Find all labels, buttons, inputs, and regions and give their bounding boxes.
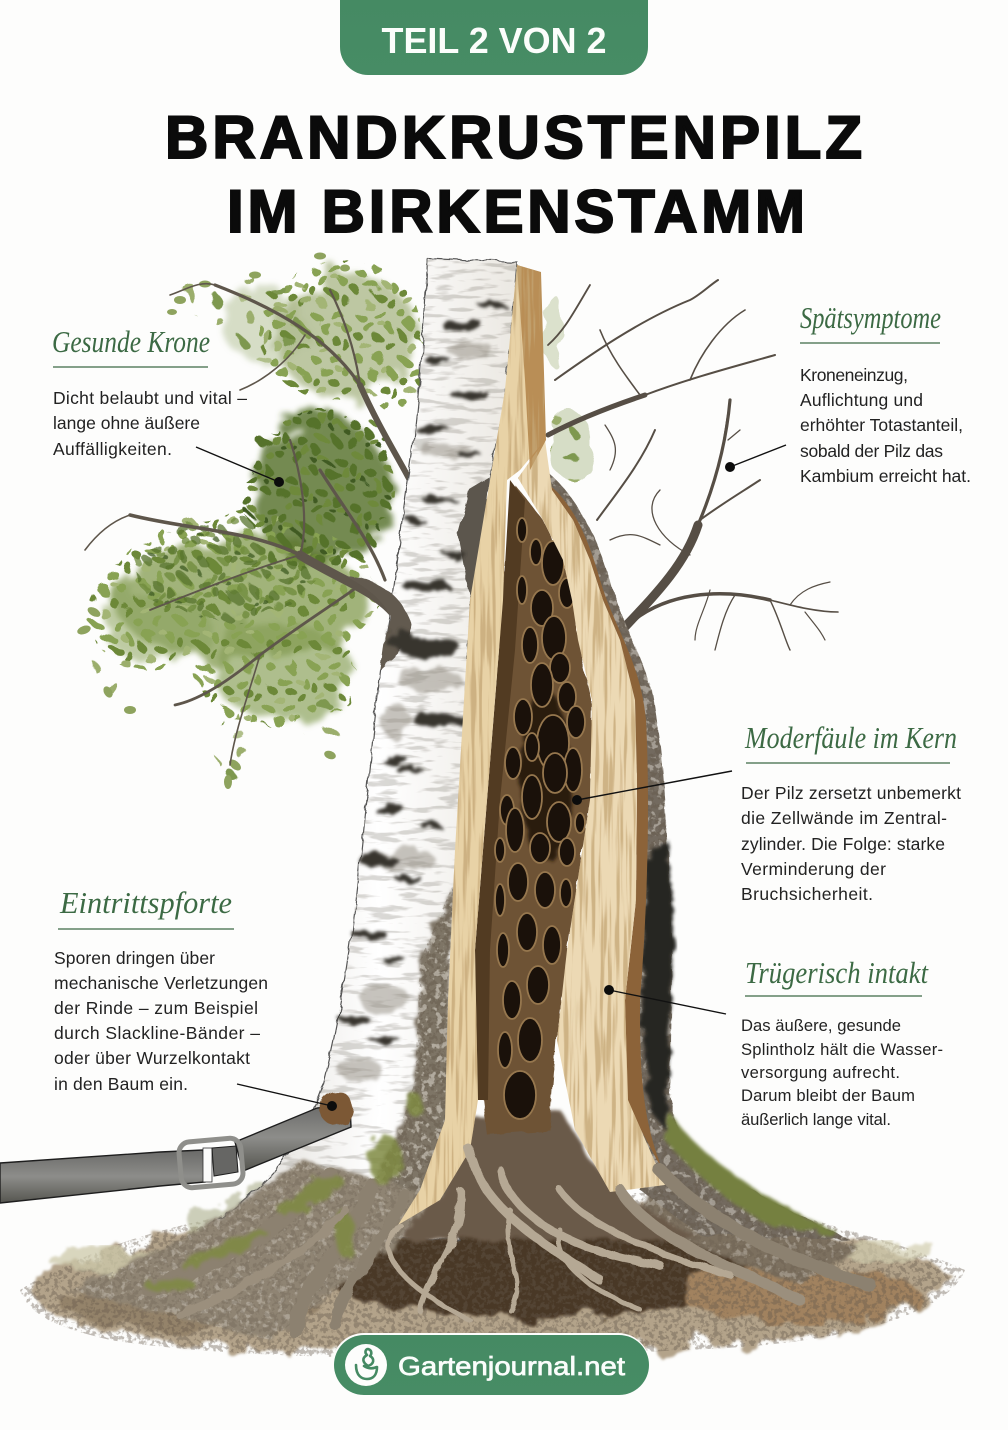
footer badge: Gartenjournal.net: [332, 1333, 650, 1398]
callout: Spätsymptome: Kroneneinzug,: [800, 365, 908, 385]
callout: Trügerisch intakt: äußerlich lange vital.: [741, 1110, 891, 1129]
main birch trunk: [200, 255, 530, 1245]
thin central roots: [180, 1150, 800, 1320]
soft foliage washes: [105, 273, 417, 718]
callout: Eintrittspforte: Sporen dringen über: [54, 948, 215, 968]
callout: Spätsymptome: sobald der Pilz das: [800, 441, 943, 461]
strap: tree section: [235, 1104, 351, 1171]
title: IM BIRKENSTAMM: [227, 178, 805, 245]
callout: Eintrittspforte: [54, 885, 337, 1111]
callout: Gesunde Krone: [52, 324, 284, 487]
callout: Eintrittspforte: in den Baum ein.: [54, 1074, 188, 1094]
lattice: [478, 485, 592, 1135]
callout: Spätsymptome: erhöhter Totastanteil,: [800, 415, 963, 435]
moss at lower right: [665, 1110, 840, 1235]
callout: Gesunde Krone: lange ohne äußere: [53, 413, 200, 433]
callout: Moderfäule im Kern: Der Pilz zersetzt unbemerkt: [741, 783, 961, 803]
title: [165, 104, 862, 245]
middle dense foliage: [135, 410, 395, 620]
wound: [319, 1091, 353, 1125]
callout: Eintrittspforte: mechanische Verletzungen: [54, 973, 268, 993]
roots and moss: [144, 1093, 870, 1330]
white bark body: [210, 258, 517, 1240]
callout: Spätsymptome: Spätsymptome: [800, 300, 941, 335]
callout: Eintrittspforte: der Rinde – zum Beispiel: [54, 998, 258, 1018]
buckle: [178, 1137, 244, 1189]
header badge: Teil 2 von 2: TEIL 2 VON 2: [382, 20, 606, 61]
callout: Gesunde Krone: Dicht belaubt und vital –: [53, 388, 247, 408]
hollow base below the core: [400, 1110, 700, 1240]
callout: Moderfäule im Kern: zylinder. Die Folge: starke: [741, 834, 945, 854]
right bark of split trunk: [540, 465, 860, 1245]
pale foliage right of trunk: [543, 294, 592, 479]
branch collar: [345, 575, 412, 670]
callout: Trügerisch intakt: Darum bleibt der Baum: [741, 1086, 915, 1105]
lenticels: [339, 302, 506, 1043]
icon: plant sprout in pot: [356, 1349, 377, 1379]
callout: Gesunde Krone: Gesunde Krone: [52, 324, 210, 359]
root flare mass: [60, 1095, 870, 1345]
gray shaded right side of lower trunk: [340, 880, 470, 1230]
callout: Moderfäule im Kern: [572, 720, 961, 904]
lower left foliage: [90, 515, 375, 780]
title: BRANDKRUSTENPILZ: [165, 104, 862, 171]
callout: Eintrittspforte: Eintrittspforte: [59, 885, 232, 920]
callout: Spätsymptome: [725, 300, 971, 486]
left cream strip: [398, 265, 545, 1225]
sapwood cream bands: [390, 260, 670, 1230]
left branches: [85, 284, 415, 765]
footer badge: Gartenjournal.net: Gartenjournal.net: [398, 1351, 626, 1381]
moss patches: [144, 1093, 423, 1291]
callout: Moderfäule im Kern: Bruchsicherheit.: [741, 884, 873, 904]
callout: Trügerisch intakt: Das äußere, gesunde: [741, 1016, 901, 1035]
foliage: healthy crown: [76, 252, 592, 789]
decay cavities: [495, 518, 585, 1119]
ground and soil: [20, 1170, 970, 1365]
callout: Trügerisch intakt: Trügerisch intakt: [745, 955, 929, 990]
upper light foliage: [182, 260, 425, 410]
gray bark patch: [458, 478, 490, 600]
callout: Moderfäule im Kern: die Zellwände im Zentral-: [741, 808, 947, 828]
brown inner rim: [545, 482, 665, 1175]
rot core with honeycomb: [475, 480, 592, 1135]
fringe leaves: [76, 252, 350, 789]
black lower bark: [640, 840, 674, 1130]
strap: left section: [0, 1150, 205, 1203]
callout: Trügerisch intakt: versorgung aufrecht.: [741, 1063, 900, 1082]
callout: Moderfäule im Kern: Verminderung der: [741, 859, 886, 879]
callout: Spätsymptome: Auflichtung und: [800, 390, 923, 410]
header badge: Teil 2 von 2: [340, 0, 648, 75]
thick left roots: [150, 1170, 870, 1330]
callout: Moderfäule im Kern: Moderfäule im Kern: [744, 720, 957, 755]
callout: Eintrittspforte: durch Slackline-Bänder –: [54, 1023, 260, 1043]
slackline strap with buckle: [0, 1091, 353, 1203]
callout: Trügerisch intakt: [604, 955, 943, 1129]
callout: Gesunde Krone: Auffälligkeiten.: [53, 439, 172, 459]
callout: Spätsymptome: Kambium erreicht hat.: [800, 466, 971, 486]
right dead branches: [548, 280, 838, 650]
callout: Eintrittspforte: oder über Wurzelkontakt: [54, 1048, 250, 1068]
callout: Trügerisch intakt: Splintholz hält die Wasser-: [741, 1040, 943, 1059]
gray bark smudges: [338, 343, 494, 1082]
